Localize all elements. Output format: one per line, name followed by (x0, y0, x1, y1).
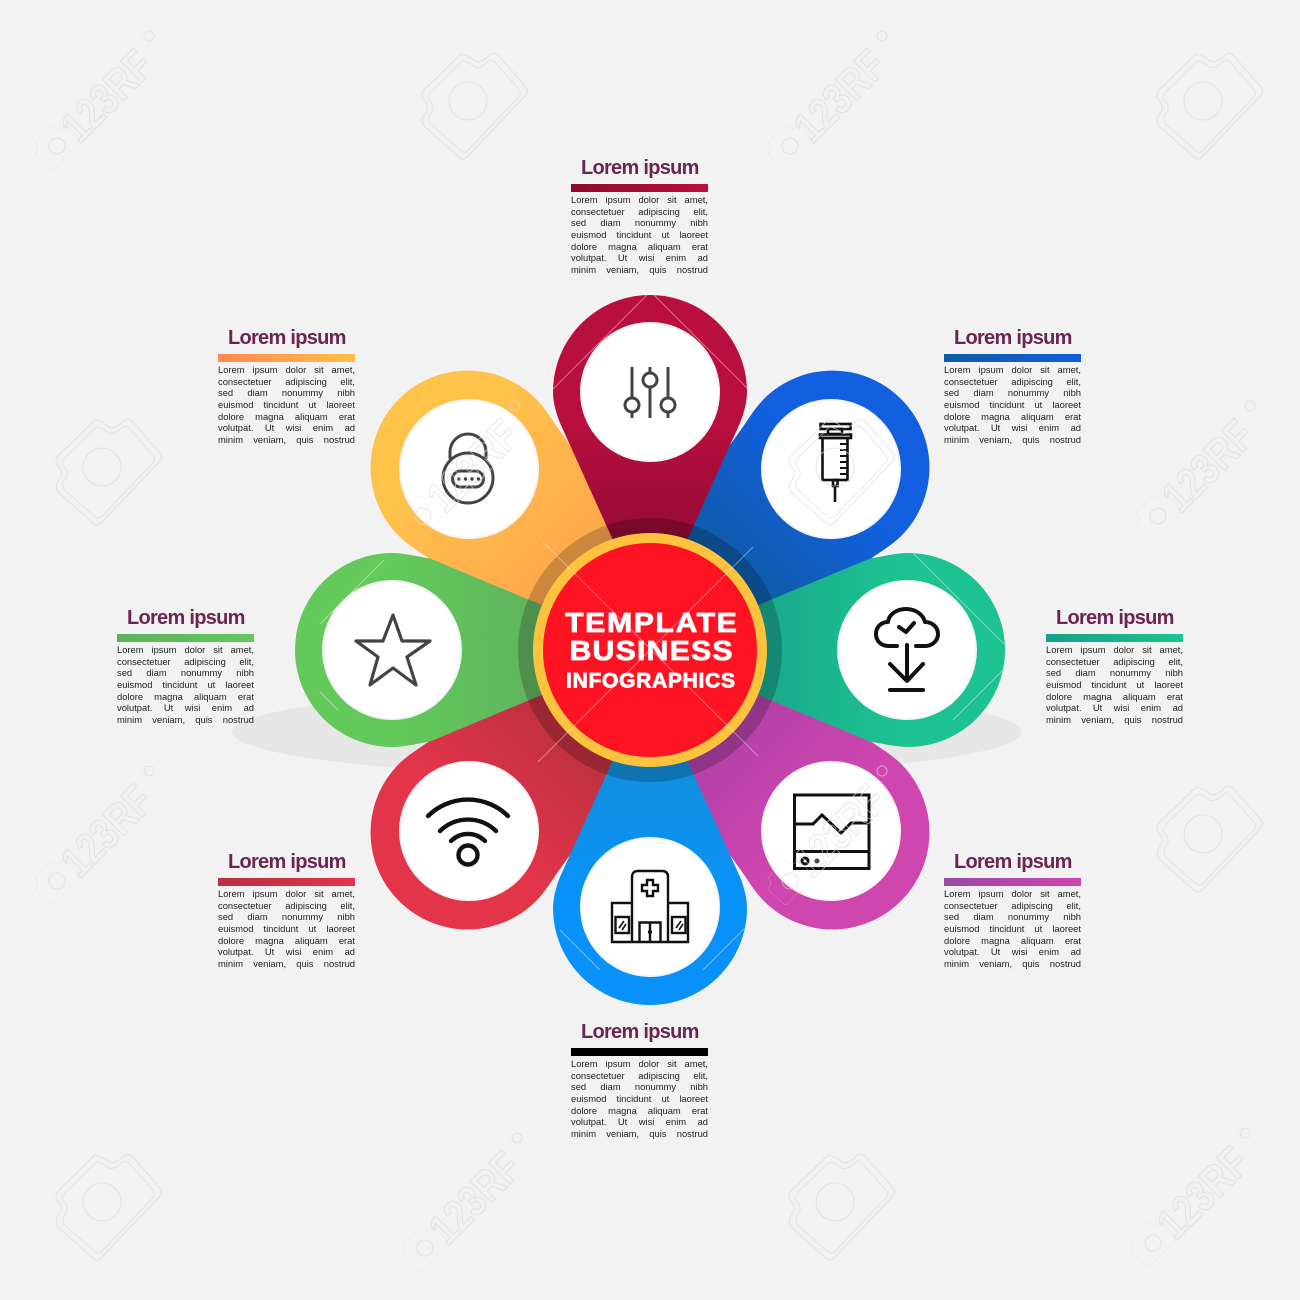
body text (1046, 644, 1183, 725)
white icon discs (323, 323, 976, 976)
colour bar (218, 354, 355, 362)
body text: Lorem ipsum dolor sit amet, (571, 194, 708, 205)
body text: minim veniam, quis nostrud (117, 714, 254, 725)
body text (218, 364, 355, 445)
body text: dolore magna aliquam erat (944, 935, 1081, 946)
body text: euismod tincidunt ut laoreet (1046, 679, 1183, 690)
hub shadow ring (518, 518, 782, 782)
body text: minim veniam, quis nostrud (944, 434, 1081, 445)
heading: Lorem ipsum (581, 1021, 699, 1043)
body text: sed diam nonummy nibh (1046, 667, 1183, 678)
body text: volutpat. Ut wisi enim ad (117, 702, 254, 713)
body text: consectetuer adipiscing elit, (1046, 656, 1183, 667)
body text: sed diam nonummy nibh (571, 217, 708, 228)
body text (571, 194, 708, 275)
watermark pattern: 123RF (785, 776, 896, 887)
watermark pattern: 123RF (52, 776, 163, 887)
text block: lower left (218, 851, 355, 969)
body text: minim veniam, quis nostrud (218, 958, 355, 969)
body text: sed diam nonummy nibh (218, 387, 355, 398)
colour bar (571, 184, 708, 192)
colour bar (1046, 634, 1183, 642)
body text: volutpat. Ut wisi enim ad (571, 252, 708, 263)
body text: Lorem ipsum dolor sit amet, (218, 888, 355, 899)
heading: Lorem ipsum (954, 327, 1072, 349)
body text: Lorem ipsum dolor sit amet, (944, 888, 1081, 899)
body text: dolore magna aliquam erat (571, 1105, 708, 1116)
colour bar (571, 1048, 708, 1056)
icon: wifi (428, 800, 508, 864)
petal: bottom blue (553, 678, 747, 1005)
heading: Lorem ipsum (228, 851, 346, 873)
text block: top (571, 157, 708, 275)
heading: Lorem ipsum (954, 851, 1072, 873)
icon: syringe (820, 424, 851, 502)
body text: minim veniam, quis nostrud (571, 1128, 708, 1139)
icon: chart monitor (794, 795, 869, 868)
petal highlight lines (320, 295, 1005, 970)
heading: Lorem ipsum (228, 327, 346, 349)
body text: minim veniam, quis nostrud (571, 264, 708, 275)
colour bar (117, 634, 254, 642)
body text: consectetuer adipiscing elit, (571, 1070, 708, 1081)
petal: teal (650, 553, 1005, 747)
body text: dolore magna aliquam erat (1046, 691, 1183, 702)
text block: upper left (218, 327, 355, 445)
ground shadow (232, 688, 1022, 776)
body text: dolore magna aliquam erat (117, 691, 254, 702)
watermark pattern: 123RF (1153, 411, 1264, 522)
body text: volutpat. Ut wisi enim ad (218, 422, 355, 433)
title (565, 608, 737, 692)
body text: sed diam nonummy nibh (218, 911, 355, 922)
heading: Lorem ipsum (1056, 607, 1174, 629)
body text: consectetuer adipiscing elit, (218, 376, 355, 387)
body text: consectetuer adipiscing elit, (571, 206, 708, 217)
body text: dolore magna aliquam erat (218, 935, 355, 946)
body text: dolore magna aliquam erat (571, 241, 708, 252)
body text: volutpat. Ut wisi enim ad (944, 422, 1081, 433)
hub yellow ring (533, 533, 767, 767)
body text: volutpat. Ut wisi enim ad (218, 946, 355, 957)
petal: orange (330, 330, 719, 719)
body text: minim veniam, quis nostrud (1046, 714, 1183, 725)
petal: left green (295, 553, 650, 747)
body text: sed diam nonummy nibh (571, 1081, 708, 1092)
icon: star (356, 615, 430, 685)
icon: cloud download (876, 609, 938, 690)
watermark pattern: 123RF (785, 41, 896, 152)
petal: crimson (553, 295, 747, 622)
body text: dolore magna aliquam erat (218, 411, 355, 422)
body text: euismod tincidunt ut laoreet (571, 1093, 708, 1104)
body text: sed diam nonummy nibh (944, 387, 1081, 398)
body text: consectetuer adipiscing elit, (944, 900, 1081, 911)
body text: Lorem ipsum dolor sit amet, (218, 364, 355, 375)
colour bar (944, 354, 1081, 362)
colour bar (944, 878, 1081, 886)
body text: Lorem ipsum dolor sit amet, (1046, 644, 1183, 655)
body text: volutpat. Ut wisi enim ad (571, 1116, 708, 1127)
center hub (518, 518, 782, 782)
body text: volutpat. Ut wisi enim ad (1046, 702, 1183, 713)
petal: royal blue (581, 330, 970, 719)
body text: consectetuer adipiscing elit, (218, 900, 355, 911)
icon: sliders (625, 367, 675, 418)
icon: hospital (612, 871, 688, 942)
hub red disc (543, 543, 757, 757)
watermark pattern: 123RF (418, 411, 529, 522)
body text: minim veniam, quis nostrud (944, 958, 1081, 969)
body text (944, 364, 1081, 445)
body text: Lorem ipsum dolor sit amet, (117, 644, 254, 655)
petal: purple (581, 581, 970, 970)
body text: consectetuer adipiscing elit, (944, 376, 1081, 387)
body text: minim veniam, quis nostrud (218, 434, 355, 445)
text block: bottom (571, 1021, 708, 1139)
heading: Lorem ipsum (127, 607, 245, 629)
text block: upper right (944, 327, 1081, 445)
body text (218, 888, 355, 969)
body text: sed diam nonummy nibh (117, 667, 254, 678)
body text (571, 1058, 708, 1139)
body text: dolore magna aliquam erat (944, 411, 1081, 422)
text block: lower right (944, 851, 1081, 969)
body text (117, 644, 254, 725)
petal: red (330, 581, 719, 970)
heading: Lorem ipsum (581, 157, 699, 179)
body text: euismod tincidunt ut laoreet (218, 399, 355, 410)
body text: volutpat. Ut wisi enim ad (944, 946, 1081, 957)
body text: euismod tincidunt ut laoreet (218, 923, 355, 934)
colour bar (218, 878, 355, 886)
title: INFOGRAPHICS (566, 670, 735, 692)
icon: combination lock (443, 434, 493, 503)
watermark pattern: 123RF (420, 1143, 531, 1254)
body text: euismod tincidunt ut laoreet (117, 679, 254, 690)
faint watermark egg under red petal (422, 786, 528, 892)
title: TEMPLATE (565, 608, 737, 639)
body text: euismod tincidunt ut laoreet (944, 923, 1081, 934)
body text: euismod tincidunt ut laoreet (944, 399, 1081, 410)
watermark pattern: 123RF (1148, 1138, 1259, 1249)
text block: left (117, 607, 254, 725)
text block: right (1046, 607, 1183, 725)
body text: consectetuer adipiscing elit, (117, 656, 254, 667)
watermark pattern: 123RF (52, 41, 163, 152)
body text: Lorem ipsum dolor sit amet, (571, 1058, 708, 1069)
body text: Lorem ipsum dolor sit amet, (944, 364, 1081, 375)
flower diagram (295, 295, 1005, 1005)
body text: euismod tincidunt ut laoreet (571, 229, 708, 240)
hub highlight lines (538, 542, 758, 762)
title: BUSINESS (569, 636, 733, 667)
body text: sed diam nonummy nibh (944, 911, 1081, 922)
body text (944, 888, 1081, 969)
